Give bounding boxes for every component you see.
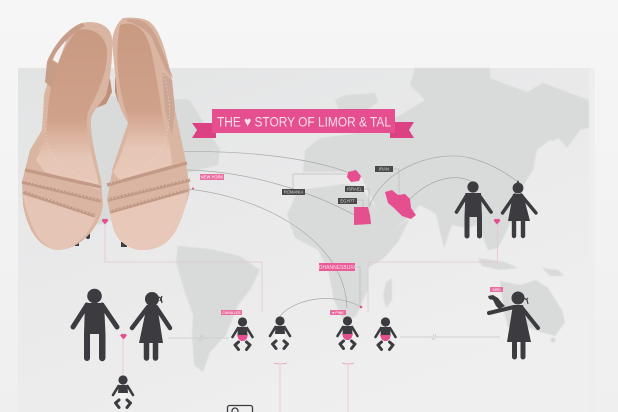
man large (73, 289, 117, 361)
toe (23, 195, 96, 250)
heel (96, 78, 112, 108)
title text: THE ♥ STORY OF LIMOR & TAL (217, 114, 391, 130)
diaper (274, 334, 286, 340)
cutout showing canvas (53, 36, 68, 63)
studded straps (22, 170, 101, 216)
bird (488, 295, 505, 309)
insole (36, 29, 107, 190)
baby: pink diaper three (338, 316, 358, 348)
camera icon (228, 406, 252, 412)
canvas panel (18, 68, 595, 412)
label: bird: BIRD (492, 288, 501, 292)
label: Romania: ROMANIA (284, 190, 303, 195)
heart: couple left (120, 334, 127, 340)
heart: under shoes (102, 219, 108, 224)
label: Johannesburg: JOHANNESBURG (316, 265, 358, 271)
back strap (125, 19, 173, 78)
shoe body (22, 22, 112, 250)
diaper (237, 335, 248, 341)
country labels (200, 166, 503, 315)
generation lines with breaks (168, 334, 500, 341)
man couple right (456, 181, 491, 238)
baby: white diaper two (270, 316, 290, 348)
toe (110, 192, 188, 250)
left shoe (22, 22, 112, 250)
Johannesburg dot (360, 306, 362, 308)
studs (24, 80, 102, 215)
label: child two: ♥ PINK (332, 311, 344, 315)
travel arcs (170, 152, 518, 316)
diaper (342, 334, 353, 340)
label: child one: CHINA LEE (222, 311, 241, 315)
diaper (118, 393, 128, 399)
country: Egypt (354, 207, 371, 225)
woman large (132, 292, 170, 358)
baby: bottom left, white diaper (113, 375, 133, 408)
label: child two (330, 310, 346, 315)
insole (113, 24, 172, 180)
label: Egypt: EGYPT (340, 199, 355, 204)
ankle strap (45, 23, 85, 88)
label: Israel: ISRAEL (347, 187, 363, 192)
woman with bird (488, 292, 538, 357)
woman couple right (502, 180, 536, 236)
country: Romania (347, 170, 361, 182)
heel (115, 77, 125, 107)
shoe body (107, 18, 190, 250)
New York dot (192, 188, 194, 190)
light Japan area (522, 140, 560, 195)
label: New York: NEW YORK (201, 175, 224, 180)
studs (108, 72, 189, 211)
side straps (162, 72, 175, 135)
diaper (380, 335, 391, 341)
family connector lines (105, 224, 498, 412)
title banner (192, 109, 414, 138)
label: Iran (375, 166, 393, 172)
figure remnants behind shoes (75, 226, 127, 247)
right shoe (107, 18, 190, 250)
label: bird (490, 287, 503, 292)
label: Iran: IRAN (379, 167, 389, 172)
label: Israel (345, 186, 364, 192)
world map (60, 68, 589, 372)
heart: couple right (494, 219, 500, 224)
label: Egypt (338, 198, 357, 204)
baby: pink diaper four (376, 317, 396, 350)
country: Iran (385, 190, 416, 219)
baby: pink diaper one (232, 317, 252, 350)
